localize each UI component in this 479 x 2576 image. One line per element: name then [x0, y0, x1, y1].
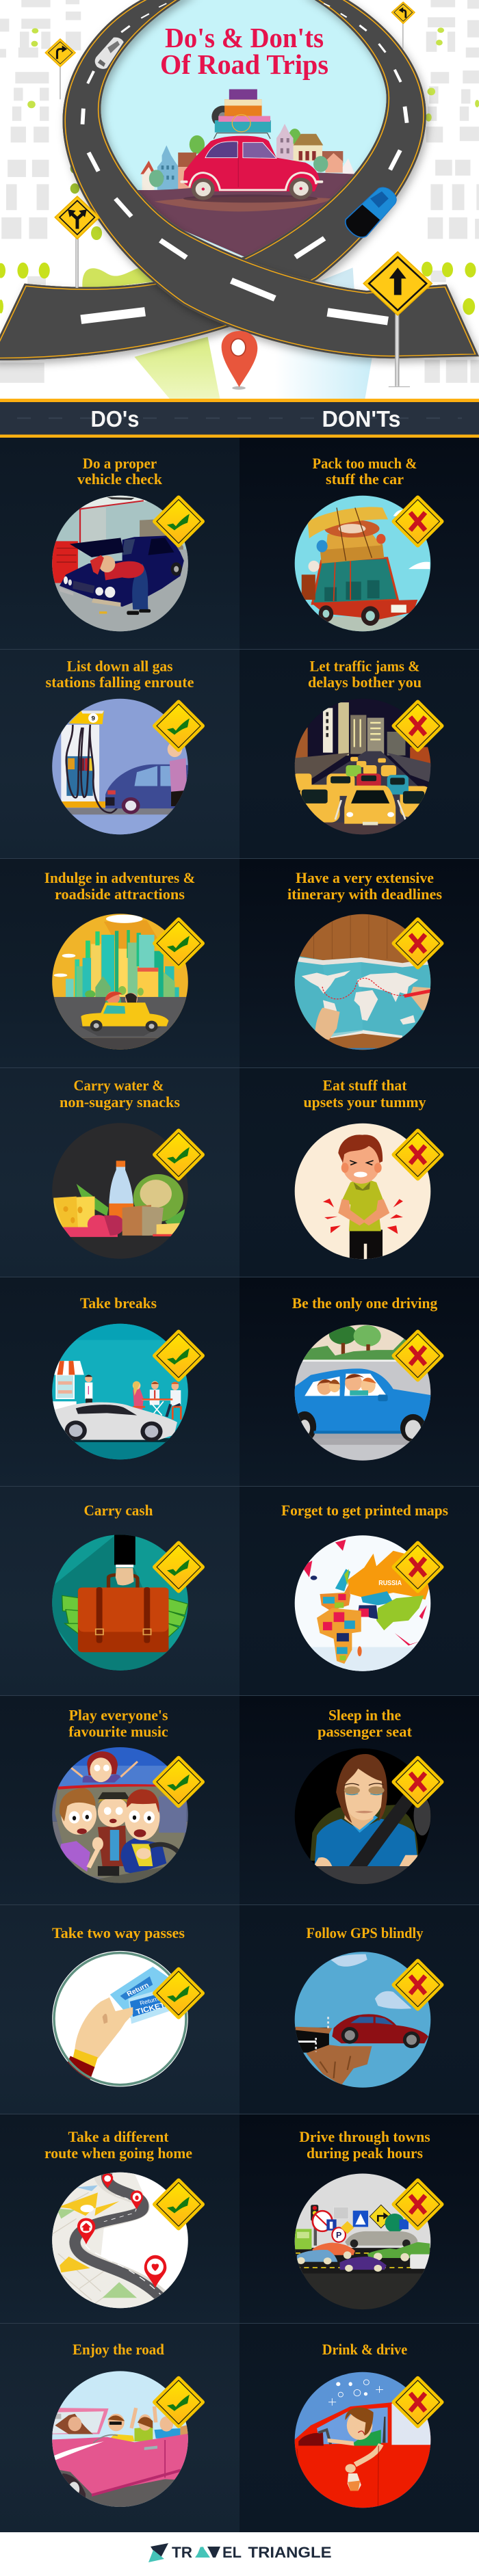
- heading: dont 7: passenger seat: [318, 1723, 413, 1740]
- illustration: man sleeping with seat belt: [294, 1748, 431, 1885]
- column header band: DO's: [90, 406, 140, 431]
- badge: check mark sign: [155, 702, 203, 749]
- heading: do 1: Do a proper: [83, 455, 157, 472]
- road: right strand over: [63, 0, 479, 358]
- panel: do 9 different route: [0, 2114, 479, 2323]
- heading: do 3: [44, 869, 195, 903]
- badge: check mark sign: [155, 1758, 203, 1806]
- heading: do 9: Take a different: [68, 2128, 169, 2145]
- badge: check mark sign: [155, 1543, 203, 1591]
- heading: dont 7: Sleep in the: [328, 1707, 401, 1723]
- panel: do 2 gas stations: [0, 649, 479, 858]
- heading: do 9: [44, 2128, 192, 2162]
- panel: do 7 favourite music: [0, 1695, 479, 1904]
- heading: do 8: Take two way passes: [52, 1924, 185, 1941]
- panel: dont 1 pack too much: [240, 438, 479, 649]
- icon: red classic car: [180, 136, 323, 200]
- heading: dont 6: Forget to get printed maps: [281, 1502, 448, 1519]
- panel: do 5 take breaks: [0, 1277, 479, 1486]
- road lane dashes: [81, 3, 407, 321]
- panel: dont 5 only driver: [240, 1277, 479, 1486]
- icon: logo triangle: [148, 2543, 168, 2562]
- panel: dont 4 tummy: [240, 1068, 479, 1277]
- heading: do 2: List down all gas: [67, 658, 173, 674]
- footer: Travel Triangle logo: EL: [222, 2544, 242, 2561]
- badge: cross sign: [394, 702, 442, 749]
- illustration: gas station pump: [52, 699, 188, 834]
- badge: check mark sign: [155, 2378, 203, 2426]
- illustration: friends in pink convertible: [52, 2371, 188, 2507]
- panel: dont 2 traffic jams: [240, 650, 479, 858]
- badge: cross sign: [394, 919, 442, 967]
- heading: dont 3: itinerary with deadlines: [287, 886, 442, 903]
- heading: dont 5: Be the only one driving: [292, 1294, 437, 1312]
- heading: dont 4: Eat stuff that: [323, 1077, 407, 1094]
- illustration: city traffic and road signs: [294, 2173, 431, 2309]
- heading: do 2: [45, 658, 194, 691]
- heading: do 4: Carry water &: [74, 1077, 164, 1094]
- heading: dont 10: Drink & drive: [322, 2341, 407, 2358]
- colour patches: [134, 336, 220, 399]
- badge: check mark sign: [155, 498, 203, 546]
- badge: cross sign: [394, 498, 442, 546]
- badge: cross sign: [394, 1332, 442, 1380]
- panel: dont 8 follow gps blindly: [240, 1905, 479, 2114]
- badge: cross sign: [394, 1543, 442, 1591]
- heading: do 1: vehicle check: [77, 470, 163, 488]
- badge: check mark sign: [155, 919, 203, 967]
- illustration: colourful world map: [294, 1535, 431, 1671]
- road: left strand under: [0, 0, 426, 360]
- panel: dont 3 itinerary: [240, 859, 479, 1067]
- panel: do 8 two way passes: [0, 1904, 479, 2114]
- panel: do 10 enjoy the road: [0, 2323, 479, 2532]
- heading: do 2: stations falling enroute: [45, 674, 194, 691]
- panel: dont 6 printed maps: [240, 1487, 479, 1695]
- illustration: family in blue car: [294, 1325, 431, 1461]
- heading: do 7: favourite music: [68, 1723, 168, 1740]
- ring: circle border: [54, 1953, 186, 2085]
- heading: do 3: Indulge in adventures &: [44, 869, 195, 886]
- heading: dont 2: [308, 658, 422, 691]
- footer: Travel Triangle logo: A: [196, 2544, 208, 2561]
- title: [160, 22, 328, 80]
- illustration: briefcase with cash: [52, 1535, 188, 1671]
- sky inside loop: [101, 0, 387, 256]
- illustration: couple in taxi and city: [52, 914, 188, 1050]
- heading: do 6: Carry cash: [83, 1502, 153, 1519]
- badge: cross sign: [394, 1758, 442, 1806]
- illustration: friends singing in a car: [52, 1747, 188, 1883]
- illustration: gas station pump: 9: [91, 715, 95, 721]
- icon: right turn road sign: [45, 39, 75, 99]
- column header band: DON'Ts: [322, 406, 401, 431]
- heading: dont 1: stuff the car: [326, 470, 404, 488]
- heading: dont 7: [318, 1707, 413, 1740]
- heading: dont 2: delays bother you: [308, 674, 422, 691]
- badge: cross sign: [394, 2378, 442, 2426]
- panel: do 1 vehicle check: [0, 438, 240, 649]
- town, ground and car scene: [138, 124, 354, 257]
- heading: dont 9: Drive through towns: [299, 2128, 430, 2145]
- heading: dont 9: during peak hours: [307, 2145, 423, 2162]
- heading: do 9: route when going home: [44, 2145, 192, 2162]
- badge: cross sign: [394, 1961, 442, 2009]
- heading: dont 3: Have a very extensive: [296, 869, 434, 886]
- badge: cross sign: [394, 1131, 442, 1179]
- illustration: hand holding return tickets: Return: [126, 1982, 151, 1998]
- icon: straight arrow road sign: [363, 252, 432, 387]
- illustration: car falling off cliff: [294, 1952, 431, 2088]
- icon: luggage stack on car roof: [211, 89, 271, 139]
- title: Do's & Don'ts: [165, 22, 324, 53]
- heading: do 4: non-sugary snacks: [60, 1093, 180, 1111]
- heading: do 5: Take breaks: [80, 1294, 157, 1312]
- heading: dont 4: [304, 1077, 426, 1111]
- panel: dont 7 sleep in passenger seat: [240, 1696, 479, 1904]
- footer: Travel Triangle logo: TR: [172, 2544, 192, 2561]
- footer: Travel Triangle logo: TRIANGLE: [248, 2544, 331, 2561]
- heading: do 3: roadside attractions: [55, 886, 185, 903]
- illustration: water bottle and food: [52, 1123, 188, 1259]
- panel: dont 9 peak hours: [240, 2114, 479, 2323]
- heading: dont 2: Let traffic jams &: [309, 658, 420, 674]
- heading: do 7: Play everyone's: [68, 1707, 168, 1723]
- illustration: city traffic and road signs: P: [336, 2231, 341, 2240]
- heading: do 7: [68, 1707, 168, 1740]
- heading: do 1: [77, 455, 163, 488]
- heading: dont 4: upsets your tummy: [304, 1093, 426, 1111]
- hero: road loop scene: [0, 0, 479, 399]
- heading: do 4: [60, 1077, 180, 1111]
- green dots: [0, 27, 479, 315]
- badge: check mark sign: [155, 1969, 203, 2017]
- heading: dont 8: Follow GPS blindly: [307, 1924, 423, 1941]
- illustration: people at roadside stall with car: [52, 1324, 188, 1459]
- illustration: boy with stomach ache: [294, 1123, 431, 1260]
- heading: dont 1: Pack too much &: [312, 455, 417, 472]
- illustration: hand holding return tickets: TICKET: [135, 2002, 166, 2017]
- badge: check mark sign: [155, 1332, 203, 1380]
- badge: check mark sign: [155, 1131, 203, 1179]
- heading: dont 9: [299, 2128, 430, 2162]
- heading: dont 1: [312, 455, 417, 488]
- title: Of Road Trips: [160, 49, 328, 80]
- panel: do 6 carry cash: [0, 1486, 479, 1695]
- column header band: [0, 399, 479, 438]
- illustration: map on wooden table: [294, 914, 431, 1050]
- icon: map location pin: [222, 331, 257, 390]
- icon: left turn road sign: [391, 2, 415, 49]
- illustration: overloaded car: [294, 495, 431, 632]
- badge: check mark sign: [155, 2180, 203, 2228]
- illustration: mechanic checking car: [52, 495, 188, 632]
- illustration: colourful world map: RUSSIA: [378, 1579, 402, 1587]
- map blocks background: [0, 0, 479, 383]
- panel: do 3 adventures: [0, 858, 479, 1067]
- panel: dont 10 drink and drive: [240, 2324, 479, 2532]
- icon: fork road sign: [55, 196, 99, 288]
- heading: do 10: Enjoy the road: [73, 2341, 164, 2358]
- badge: cross sign: [394, 2180, 442, 2228]
- heading: dont 3: [287, 869, 442, 903]
- illustration: hand holding return tickets: Return: [139, 1995, 159, 2006]
- footer: Travel Triangle logo: [0, 2532, 479, 2576]
- footer: Travel Triangle logo: V: [208, 2544, 220, 2561]
- illustration: road map with pins: [52, 2172, 188, 2309]
- panel: do 4 water and snacks: [0, 1067, 479, 1277]
- illustration: taxi traffic jam: [294, 699, 431, 834]
- icon: silver car on road: [95, 38, 124, 69]
- icon: blue car on road: [346, 187, 396, 237]
- illustration: hand holding return tickets: [52, 1950, 188, 2087]
- illustration: drunk driver with bottle: [289, 2367, 437, 2512]
